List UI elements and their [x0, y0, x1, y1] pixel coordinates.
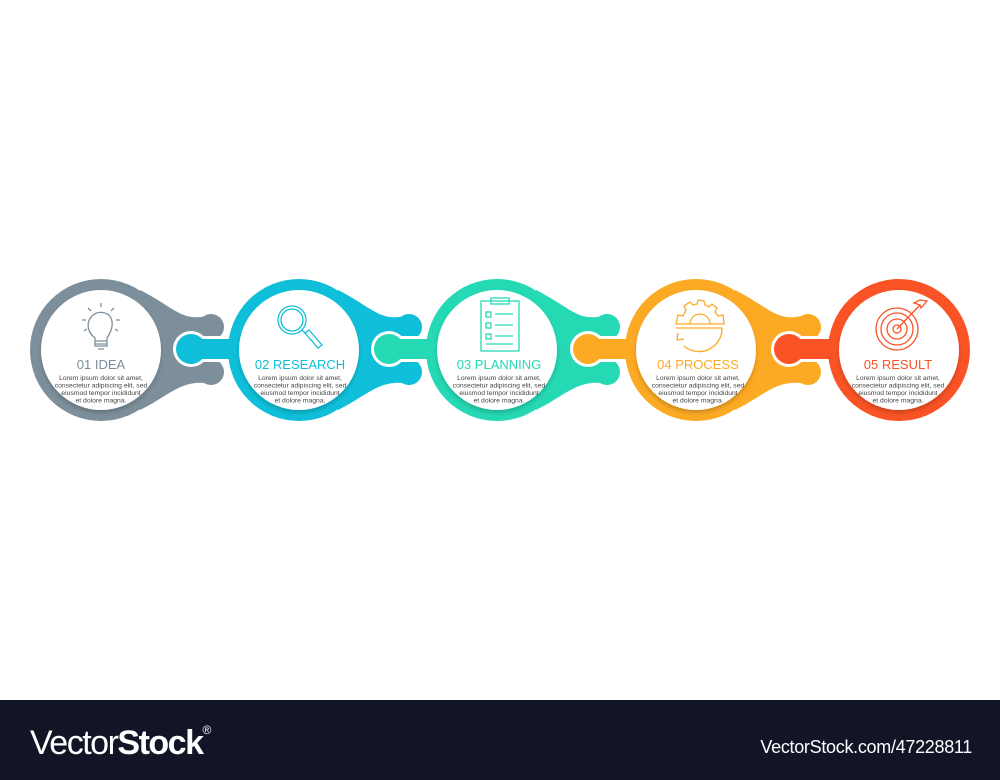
text 5: Lorem ipsum dolor sit amet, [856, 375, 940, 382]
text 4: consectetur adipiscing elit, sed [652, 382, 744, 390]
text 2: et dolore magna. [274, 398, 326, 404]
connector 4 [570, 290, 821, 410]
icon: target [876, 300, 927, 350]
text 3: et dolore magna. [473, 398, 525, 404]
step 4: process [570, 279, 821, 421]
title 5: 05 RESULT [864, 357, 932, 372]
text 1: et dolore magna. [75, 398, 127, 404]
text 4: Lorem ipsum dolor sit amet, [656, 375, 740, 382]
ring 4 [625, 279, 767, 421]
icon: gear cycle [676, 300, 724, 352]
ring 1 [30, 279, 172, 421]
text 4: et dolore magna. [672, 398, 724, 404]
text 3: consectetur adipiscing elit, sed [453, 382, 545, 390]
text 2 [254, 375, 346, 404]
title 4: 04 PROCESS [657, 357, 739, 372]
text 3: Lorem ipsum dolor sit amet, [457, 375, 541, 382]
text 2: Lorem ipsum dolor sit amet, [258, 375, 342, 382]
text 2: eiusmod tempor incididunt [260, 390, 340, 397]
title 2: 02 RESEARCH [255, 357, 345, 372]
connector 2 [173, 290, 422, 410]
text 2: consectetur adipiscing elit, sed [254, 382, 346, 390]
text 3 [453, 375, 545, 404]
step 2: research [173, 279, 422, 421]
text 5: consectetur adipiscing elit, sed [852, 382, 944, 390]
title 1: 01 IDEA [77, 357, 126, 372]
text 3: eiusmod tempor incididunt [459, 390, 539, 397]
icon: clipboard [481, 298, 519, 351]
ring 5 [828, 279, 970, 421]
footer bar [0, 700, 1000, 780]
step 5: result [771, 279, 970, 421]
text 1 [55, 375, 147, 404]
text 1: consectetur adipiscing elit, sed [55, 382, 147, 390]
text 1: eiusmod tempor incididunt [61, 390, 141, 397]
ring 2 [228, 279, 370, 421]
connector 1 [140, 290, 224, 410]
text 4 [652, 375, 744, 404]
icon: light bulb [82, 303, 120, 349]
footer logo: ® [202, 723, 211, 737]
footer logo: VectorStock [30, 724, 202, 762]
text 5: eiusmod tempor incididunt [858, 390, 938, 397]
step 3: planning [371, 279, 620, 421]
connector 5 [771, 331, 848, 367]
title 3: 03 PLANNING [457, 357, 541, 372]
connector 3 [371, 290, 620, 410]
step 1: idea [30, 279, 224, 421]
text 5: et dolore magna. [872, 398, 924, 404]
icon: magnifier [278, 306, 322, 348]
text 5 [852, 375, 944, 404]
ring 3 [426, 279, 568, 421]
footer url: VectorStock.com/47228811 [760, 737, 972, 757]
text 1: Lorem ipsum dolor sit amet, [59, 375, 143, 382]
text 4: eiusmod tempor incididunt [658, 390, 738, 397]
